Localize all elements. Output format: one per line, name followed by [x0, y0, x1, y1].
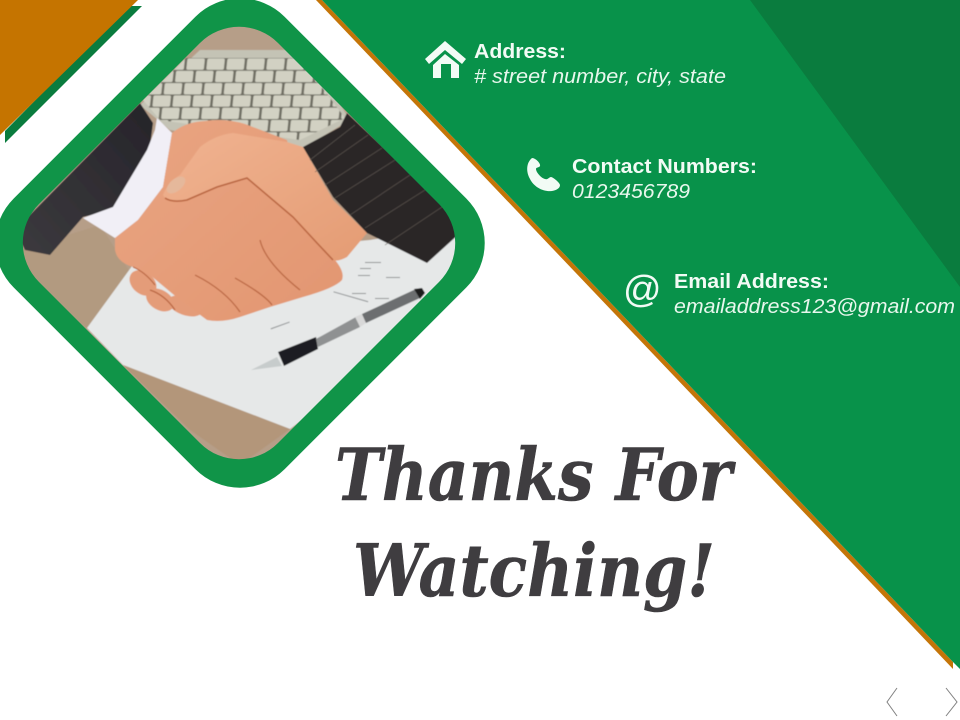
- desk bottom: [123, 365, 290, 465]
- email text: [674, 270, 955, 318]
- lower hand fingers: [129, 270, 200, 317]
- address text: [474, 40, 726, 88]
- lower hand: [115, 120, 343, 321]
- icon: next arrow: [946, 688, 957, 716]
- title: Watching!: [353, 528, 715, 613]
- email text: Email Address:: [674, 270, 829, 293]
- pinstripes: [310, 125, 445, 245]
- finger creases: [133, 240, 300, 312]
- panel: contact background: [316, 0, 960, 669]
- contact numbers block: [527, 155, 757, 203]
- title: [335, 432, 736, 613]
- keyboard: [140, 50, 350, 150]
- address block: [425, 40, 726, 88]
- document text lines: [271, 262, 400, 329]
- pen: [251, 288, 425, 370]
- thumb nail: [166, 176, 185, 194]
- panel: orange corner top left: [0, 0, 142, 143]
- desk left: [60, 240, 64, 244]
- title: Thanks For: [335, 432, 736, 517]
- email block: [623, 269, 955, 318]
- contact text: 0123456789: [572, 180, 690, 203]
- icon: phone: [527, 158, 560, 191]
- panel: photo frame diamond: [0, 0, 511, 514]
- icon: at sign: @: [623, 269, 662, 311]
- upper hand with thumb: [163, 133, 367, 261]
- icon: house: [425, 41, 466, 78]
- thumb crease shadow: [165, 178, 333, 260]
- white cuff: [83, 118, 172, 238]
- left sleeve: [20, 103, 153, 255]
- photo: handshake over document: [20, 20, 460, 465]
- address text: Address:: [474, 40, 566, 63]
- right sleeve: [303, 113, 460, 263]
- contact text: [572, 155, 757, 203]
- email text: emailaddress123@gmail.com: [674, 295, 955, 318]
- address text: # street number, city, state: [474, 65, 726, 88]
- icon: previous arrow: [887, 688, 897, 716]
- contact text: Contact Numbers:: [572, 155, 757, 178]
- paper document: [87, 225, 460, 429]
